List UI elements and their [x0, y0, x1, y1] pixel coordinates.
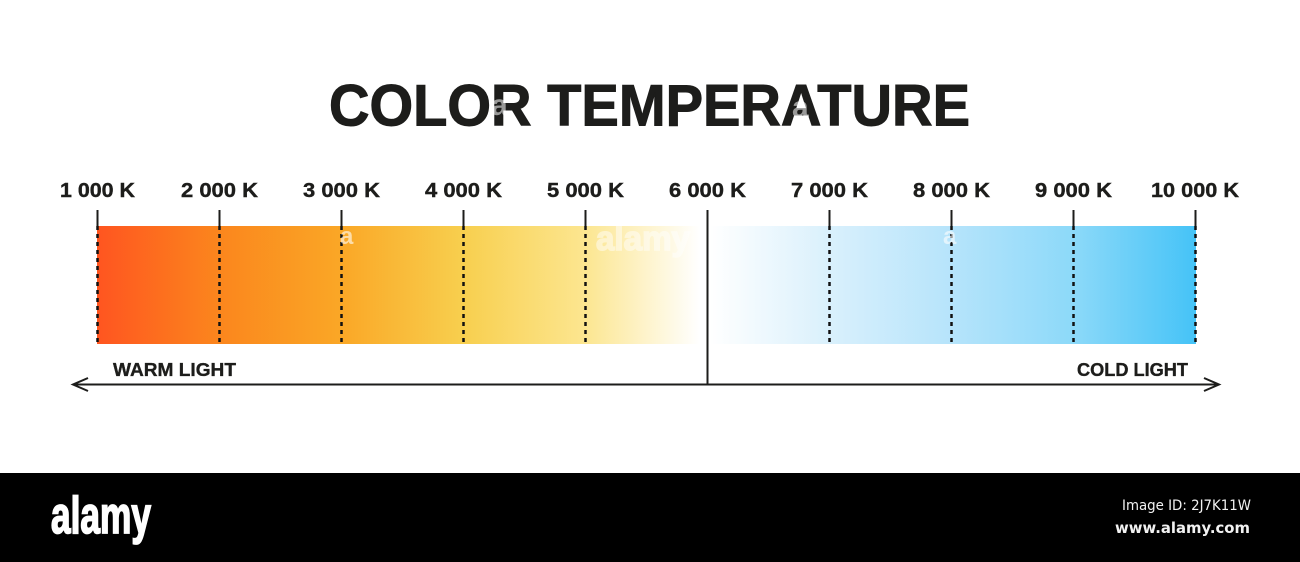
temperature scale labels: 5 000 K [547, 179, 624, 202]
warm light label: WARM LIGHT [113, 360, 236, 380]
website: www.alamy.com [1115, 519, 1250, 537]
temperature scale labels: 3 000 K [303, 179, 380, 202]
watermark over title: a [792, 91, 809, 124]
footer band [0, 473, 1300, 562]
temperature scale labels: 2 000 K [181, 179, 258, 202]
temperature scale labels: 8 000 K [913, 179, 990, 202]
tick marks [98, 210, 1196, 344]
cold light label: COLD LIGHT [1077, 360, 1188, 380]
logo: alamy: alamy [51, 487, 151, 545]
watermark over title [491, 89, 809, 124]
temperature scale labels: 4 000 K [425, 179, 502, 202]
temperature scale labels: 6 000 K [669, 179, 746, 202]
watermark over bar [340, 220, 957, 258]
temperature scale labels [60, 179, 1239, 202]
image id: Image ID: 2J7K11W [1122, 498, 1251, 514]
watermark over bar: a [340, 223, 354, 250]
double-headed arrow [73, 378, 1219, 391]
temperature scale labels: 9 000 K [1035, 179, 1112, 202]
temperature scale labels: 7 000 K [791, 179, 868, 202]
watermark over title: a [491, 89, 508, 122]
gradient bar [97, 226, 1196, 344]
watermark over bar: alamy [596, 220, 690, 258]
temperature scale labels: 10 000 K [1151, 179, 1239, 202]
temperature scale labels: 1 000 K [60, 179, 135, 202]
centre divider at 6000 K [706, 210, 708, 385]
watermark over bar: a [943, 223, 957, 250]
title: COLOR TEMPERATURE [329, 74, 970, 138]
